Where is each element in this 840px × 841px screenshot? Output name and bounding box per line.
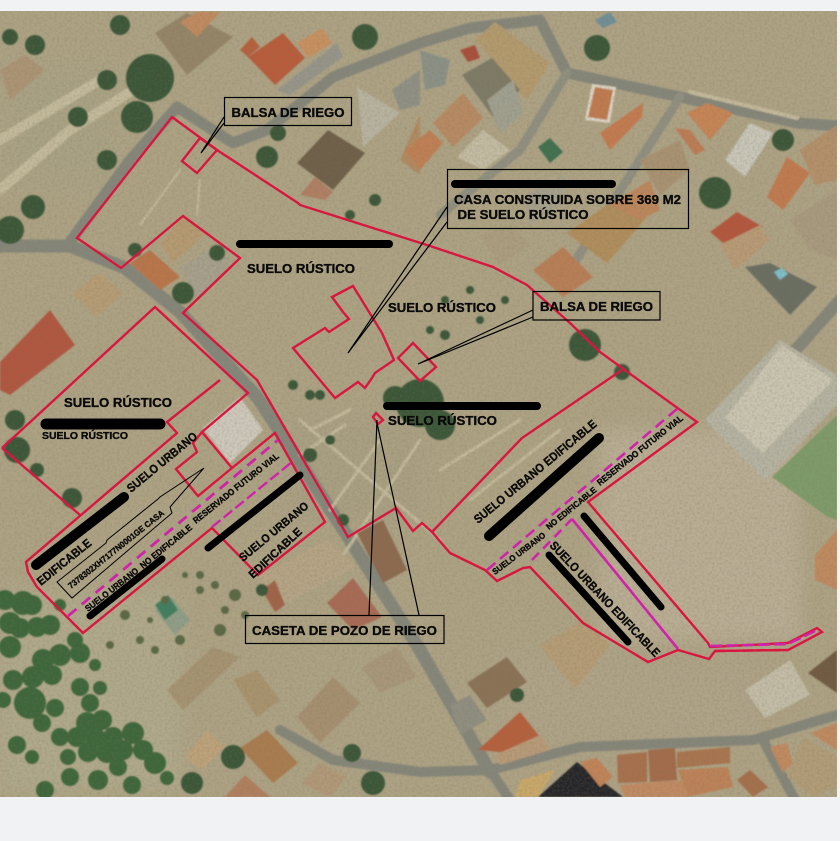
- label: suelo rústico west: SUELO RÚSTICO: [64, 395, 172, 410]
- label: no edificable east: NO EDIFICABLE: [544, 485, 599, 532]
- dashed line east: [487, 409, 677, 570]
- parcel boundaries: [2, 117, 822, 662]
- reserved road lines: [68, 409, 817, 651]
- callout: casa construida: DE SUELO RÚSTICO: [458, 207, 589, 222]
- label: reservado futuro vial west: RESERVADO FUTURO VIAL: [191, 451, 281, 526]
- callout: caseta de pozo de riego: CASETA DE POZO DE RIEGO: [252, 624, 437, 638]
- callout: casa construida: [348, 170, 688, 353]
- boundary: urban parcel east: [432, 370, 622, 532]
- label: suelo rústico south: SUELO RÚSTICO: [388, 413, 497, 428]
- label: suelo urbano: SUELO URBANO: [124, 429, 200, 495]
- callout: balsa de riego north: BALSA DE RIEGO: [232, 106, 345, 120]
- callout: casa construida: CASA CONSTRUIDA SOBRE 369 M2: [454, 193, 681, 207]
- pointer: cadastral reference house: 7378302XH7177N0001GE CASA: [66, 508, 166, 591]
- orchard trees: [0, 590, 174, 799]
- callout: balsa de riego central: BALSA DE RIEGO: [540, 300, 653, 314]
- boundary: main rustic parcel: [77, 117, 822, 662]
- label: suelo urbano edificable east: SUELO URBANO EDIFICABLE: [471, 417, 600, 526]
- boundary: built house: [293, 286, 394, 398]
- dashed line west: [68, 440, 278, 616]
- label: suelo urbano no edificable east: SUELO URBANO: [490, 530, 548, 577]
- redaction bars: [36, 184, 661, 642]
- callout: caseta de pozo de riego: [246, 420, 444, 644]
- boundary: irrigation pond central: [398, 343, 436, 381]
- label: suelo urbano edificable southeast: SUELO URBANO EDIFICABLE: [547, 538, 663, 660]
- boundary: irrigation pond north: [182, 138, 217, 173]
- label: suelo rústico central: SUELO RÚSTICO: [388, 300, 496, 315]
- label: edificable south: EDIFICABLE: [247, 526, 305, 581]
- boundary: rustic parcel west: [2, 307, 248, 496]
- pointer: cadastral reference house: [57, 468, 204, 598]
- label: suelo rústico west small: SUELO RÚSTICO: [42, 429, 128, 442]
- olive trees: [106, 571, 249, 654]
- callout: balsa de riego central: [418, 292, 660, 364]
- label: no edificable west: NO EDIFICABLE: [138, 523, 194, 571]
- boundary: well hut: [373, 413, 383, 424]
- label: suelo urbano edificable south: SUELO URBANO: [237, 500, 311, 564]
- dashed strip: [710, 630, 817, 646]
- label: reservado futuro vial east: RESERVADO FUTURO VIAL: [595, 413, 685, 488]
- label: suelo urbano no edificable west: SUELO URBANO: [83, 566, 140, 614]
- label: suelo rústico north: SUELO RÚSTICO: [247, 261, 355, 276]
- label: edificable: EDIFICABLE: [34, 536, 94, 588]
- callout: balsa de riego north: [201, 98, 352, 153]
